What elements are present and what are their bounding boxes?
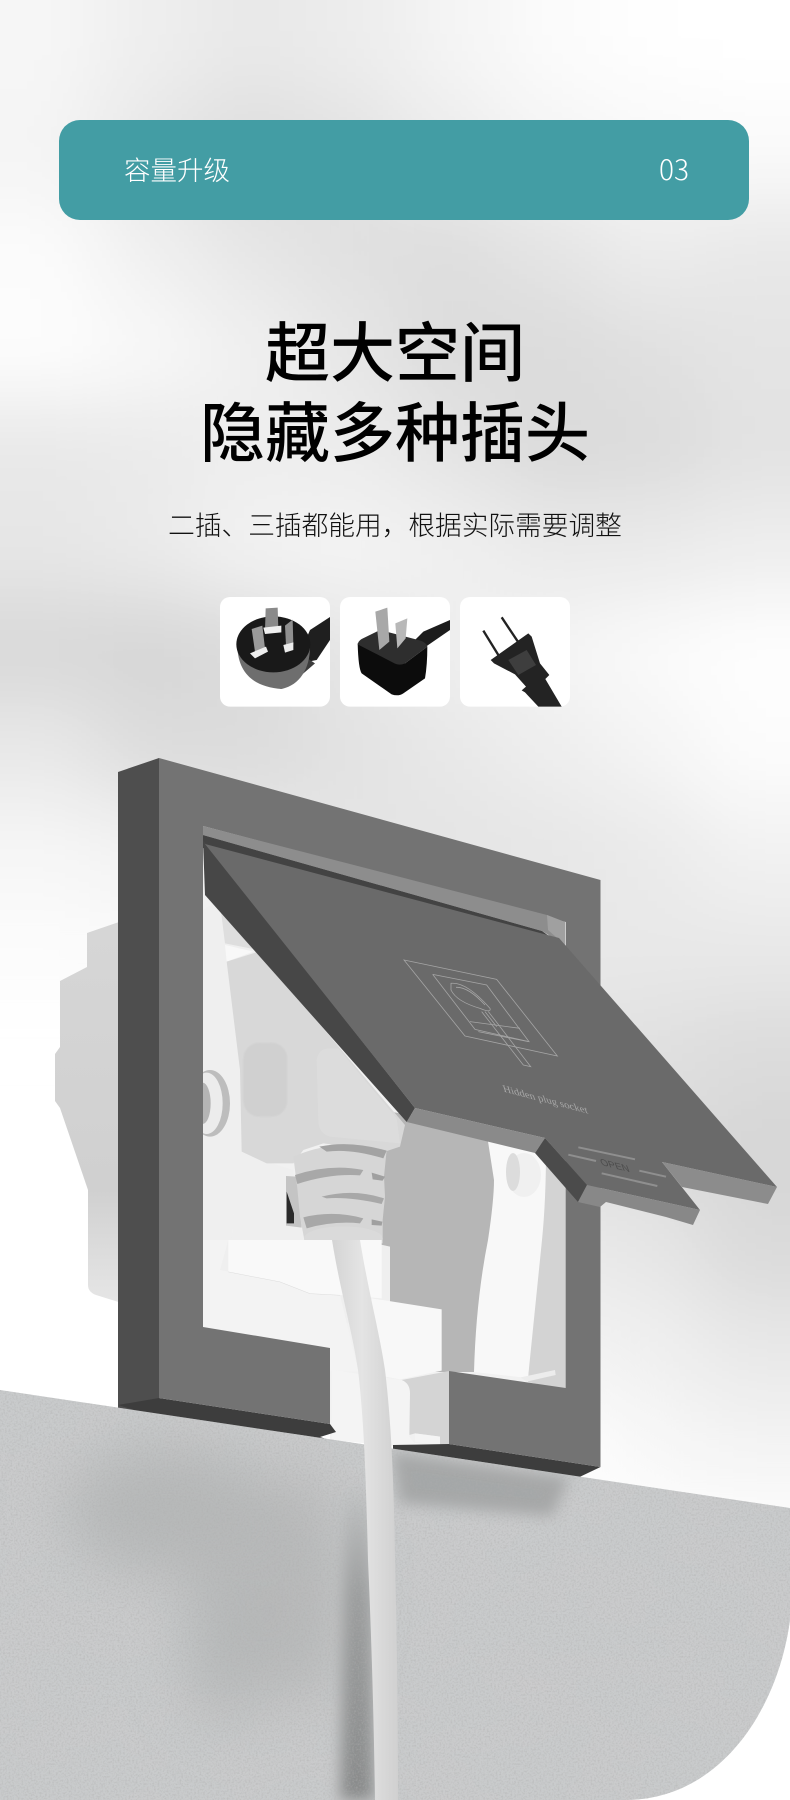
top grey wedge [218, 897, 258, 950]
keyhole on strut [506, 1153, 541, 1197]
frame: front face [159, 758, 600, 1467]
tile: three-pin round plug [220, 597, 330, 707]
title: main heading: 超大空间 [265, 301, 525, 395]
socket interior parts [190, 897, 405, 1323]
engraved label: Hidden plug socket [501, 1083, 589, 1116]
left white column [203, 898, 260, 1323]
banner label: 容量升级 [124, 149, 230, 188]
power cord [332, 1240, 398, 1800]
socket grey body [227, 952, 405, 1163]
white block [360, 1298, 442, 1379]
small tab [521, 1370, 556, 1382]
grey back wall [380, 1110, 500, 1372]
title: main heading: 隐藏多种插头 [200, 381, 590, 475]
lid: front flanges [407, 1108, 777, 1225]
plug head outline [317, 1048, 400, 1143]
engraved plug line art [404, 960, 557, 1067]
lower white body [227, 1153, 390, 1323]
dark slot [286, 1176, 302, 1228]
rear mounting box behind frame [55, 922, 125, 1304]
open label: OPEN [599, 1158, 631, 1175]
banner number: 03 [659, 149, 689, 189]
white lower housing [203, 1240, 358, 1372]
lid: engraved icon and label [404, 960, 666, 1186]
frame: left dark side [118, 758, 159, 1420]
clip [415, 1433, 440, 1446]
frame cast shadow [392, 1452, 569, 1516]
open slots [568, 1147, 666, 1186]
lower socket block parts [203, 1240, 556, 1446]
frame: bottom dark edges [118, 1398, 600, 1482]
tile: two-flat-pin angled plug [340, 597, 450, 707]
opening interior base [203, 826, 566, 1445]
socket product illustration [0, 758, 790, 1800]
grey neck [402, 1371, 449, 1446]
screw boss [190, 1070, 230, 1137]
upper white panel [228, 1240, 382, 1298]
lid: top surface [205, 844, 777, 1210]
shadow blotches on wall [65, 1445, 345, 1725]
cord cast shadow [340, 1480, 374, 1800]
banner: section header bar [59, 120, 749, 220]
bright ledge [225, 945, 253, 962]
title: main heading [200, 301, 590, 475]
right side wall [528, 1140, 566, 1390]
white curved strut [474, 1135, 546, 1378]
concrete wall slab [0, 1380, 790, 1800]
rounded lower part [332, 1370, 415, 1446]
subtitle text: 二插、三插都能用，根据实际需要调整 [168, 504, 622, 543]
tile: two-pin plug [460, 597, 570, 707]
body rounded bump [243, 1043, 287, 1117]
frame: inner bevel strip [203, 826, 566, 948]
lid: dark side edge [203, 840, 415, 1122]
strain relief rings [293, 1144, 387, 1250]
